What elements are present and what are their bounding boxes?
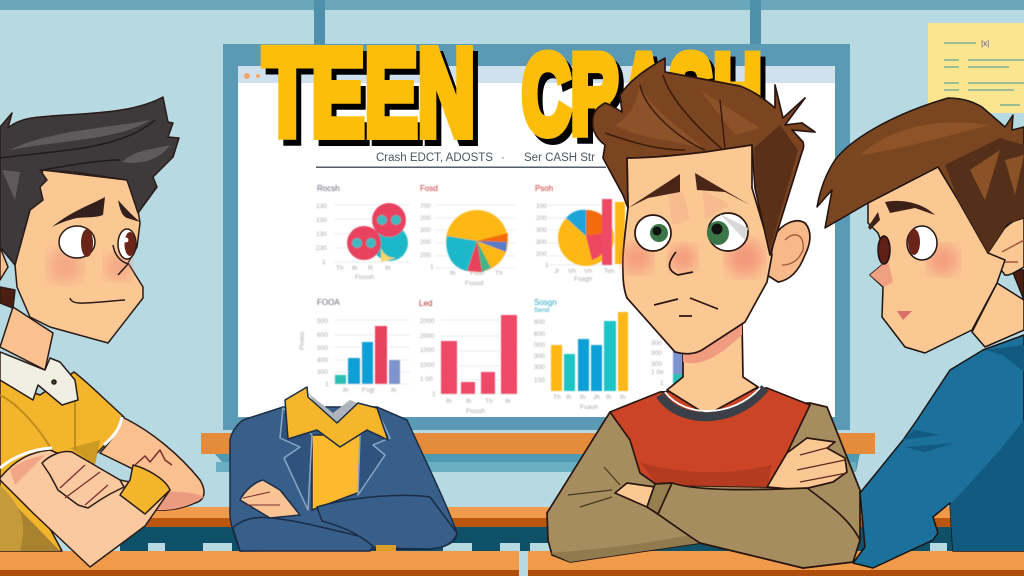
neck [0,307,53,370]
chart: bars 1: 1 [325,381,329,388]
character: left boy [0,97,204,567]
chart: circles [316,184,410,281]
sticky note [928,23,1024,113]
hand [240,480,300,518]
chart: circles: Ih [385,265,391,272]
board subtitle [316,152,606,168]
hair back [1012,270,1024,300]
chart: bars 2: 2000 [420,333,435,340]
chart: partial bars: 300 [651,340,662,347]
presentation board [223,44,850,430]
chart: pie: Fosh [470,270,485,277]
chart: bars 3: Send [534,307,550,314]
chart: pie and bars [535,184,625,283]
chart: pie and bars: Teh [604,268,615,275]
chart: bars 3: Ih [580,394,586,401]
chart: bars 3: Ih [606,394,612,401]
chart: pie and bars: Jr [554,268,560,275]
chart: bars 2: Fisosh [466,408,486,415]
chart: pie and bars: 300 [536,227,547,234]
chart: circles: 130 [316,217,327,224]
chart: pie and bars: 300 [536,239,547,246]
chart: bars 3: Ih [566,394,572,401]
torso [0,372,124,551]
neck [667,320,758,415]
chart: circles: Fisosh [355,274,375,281]
chart: partial bars [651,340,685,387]
chart: pie: Fouod [465,280,484,287]
chart: bars 3: 600 [534,331,545,338]
chart: pie and bars: Psoh [535,184,553,193]
chart: partial bars: 1 0e [651,369,664,376]
forearm [647,483,860,568]
chart: pie and bars: 1 [545,262,549,269]
chart: bars 1 [299,298,410,394]
face [623,140,772,354]
hand left [615,483,655,507]
board subtitle: · [501,152,505,164]
chart: bars 2: Ih [466,398,472,405]
chart: circles: 1 [322,259,326,266]
shading [550,535,858,568]
chart: bars 2: 1 [432,391,436,398]
eyes [635,213,748,251]
chart: bars 1: Ih [343,387,349,394]
title: TEEN CRASH [263,25,767,168]
chart: pie [420,184,515,287]
chart: pie: 700 [420,203,431,210]
board subtitle: Ser CASH Str [524,152,595,164]
hand [42,452,124,508]
ear detail [1002,240,1024,262]
chart: bars 1: Prolos [299,331,306,350]
chart: bars 1: 400 [317,357,328,364]
hoodie [853,335,1024,568]
mouth [897,311,912,320]
chart: bars 2: 1 00 [420,376,433,383]
neck [972,283,1024,347]
blush [870,245,958,287]
left forearm [233,517,377,551]
chart: circles: 130 [316,203,327,210]
lapels [280,408,390,510]
collar [285,387,388,447]
chart: pie and bars: Vh [568,268,576,275]
chart: circles: Rocsh [317,184,340,193]
ear [767,221,810,282]
chart: bars 3: 300 [534,353,545,360]
nose and mouth [654,252,718,316]
chart: bars 1: 600 [317,332,328,339]
chart: bars 3: 300 [534,364,545,371]
wristband [120,465,170,514]
chart: pie: Fosd [420,184,438,193]
chart: bars 3: Fsaoh [580,404,598,411]
chart: pie and bars: Vh [584,268,592,275]
ear [988,217,1024,275]
blush [622,190,763,276]
eyes [59,226,136,259]
chart: bars 2 [419,299,518,415]
chart: bars 2: 1000 [420,347,435,354]
neck [308,393,357,443]
chart: circles: Th [336,265,344,272]
blush [48,249,131,283]
chart: pie: 300 [420,227,431,234]
charts [299,184,685,415]
character: right boy [817,98,1024,568]
chart: pie: Th [495,270,503,277]
far arm [100,417,204,510]
hand right [767,438,847,490]
chart: bars 3: Th [553,394,561,401]
collar [660,388,765,417]
eyes [878,226,937,264]
right forearm [317,495,457,549]
chart: pie: 200 [420,239,431,246]
character: centre boy [547,58,860,568]
chart: bars 2: Ih [446,398,452,405]
chart: bars 2: Th [485,398,493,405]
chart: pie and bars: 200 [536,215,547,222]
chart: pie and bars: 200 [536,251,547,258]
brows [868,201,935,230]
red shirt [610,388,810,487]
hair [0,97,179,265]
brows [52,197,140,227]
chart: bars 3: 150 [534,377,545,384]
chart: bars 1: 500 [317,318,328,325]
hair back and ear [0,247,15,308]
chart: bars 3: Sosgn [534,298,557,307]
chart: pie: 200 [420,252,431,259]
title: TEEN CRASH: TEEN [263,25,475,162]
chart: bars 3: Jh [593,394,600,401]
chart: bars 1: 500 [317,345,328,352]
chart: bars 3: 000 [534,342,545,349]
front desks [0,551,1024,576]
chart: pie: 200 [420,215,431,222]
chart: partial bars: 300 [651,350,662,357]
sticky note: |x| [981,39,989,48]
collar [0,352,78,405]
chart: partial bars: 300 [651,361,662,368]
hair [817,98,1024,253]
chart: bars 3: 900 [534,319,545,326]
chart: circles: 130 [316,231,327,238]
face [15,170,143,343]
brows [628,173,750,208]
near arm [0,450,170,567]
chart: pie: 1 [430,264,434,271]
hoodie shading [902,345,1024,551]
sweater [312,435,360,510]
jacket [230,407,457,551]
chart: bars 2: Ih [505,398,511,405]
chart: bars 3: Ih [620,394,626,401]
nose and mouth [70,245,128,303]
face [868,167,1005,353]
character: headless figure in jacket [230,387,457,551]
chart: bars 3 [534,298,628,411]
chart: partial bars: 1 [660,380,664,387]
chart: circles: R [368,265,373,272]
chart: pie: Ih [450,270,456,277]
chart: bars 1: FOOA [317,298,340,307]
chart: bars 2: Led [419,299,432,308]
sleeve trim [0,417,122,468]
shelf [201,433,875,472]
title: TEEN CRASH: CRASH [522,32,762,157]
chart: pie and bars: 100 [536,203,547,210]
chart: bars 1: 300 [317,369,328,376]
hair [593,58,815,255]
chart: circles: 230 [316,245,327,252]
sweater sleeves [547,403,860,568]
chart: bars 2: 1000 [420,362,435,369]
chart: bars 2: 2000 [420,318,435,325]
title: TEEN CRASH: CRASH [527,38,767,163]
title: TEEN CRASH: TEEN [268,31,480,168]
back desk [120,507,970,551]
chart: circles: Ih [352,265,358,272]
chart: pie and bars: Fsagh [574,276,592,283]
board subtitle: Crash EDCT, ADOSTS [376,152,493,164]
chart: bars 1: Fsgt [362,387,375,394]
chart: bars 1: Ih [391,387,397,394]
